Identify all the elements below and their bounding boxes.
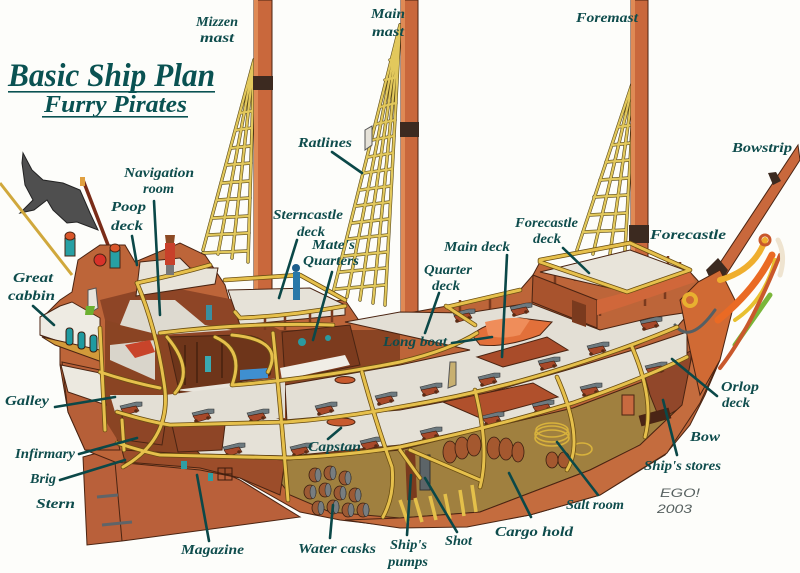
label: great cabbin [8, 271, 55, 325]
panel: lower stern gallery [61, 365, 106, 405]
bowsprit [706, 145, 800, 292]
title: Basic Ship Plan [7, 58, 215, 94]
label: brig [29, 460, 125, 487]
label: great cabbin: cabbin [8, 289, 55, 304]
label: bow: Bow [689, 430, 721, 445]
label: ship's pumps: pumps [387, 555, 429, 570]
rigging: ratlines [203, 25, 635, 305]
label: sterncastle deck: deck [297, 225, 325, 240]
cannons [120, 303, 667, 457]
stern lanterns and ornament [65, 232, 120, 268]
label: shot [425, 478, 473, 549]
storeroom below gun deck [172, 425, 225, 452]
longboat and gratings [443, 318, 568, 418]
hull planking bow band [345, 340, 720, 528]
label: main deck: Main deck [443, 240, 510, 255]
label: ratlines: Ratlines [297, 136, 353, 151]
label: mate's quarters: Mate's [311, 238, 356, 253]
foremast [627, 0, 652, 281]
figurehead [675, 235, 783, 368]
label: orlop deck [672, 359, 759, 411]
label: infirmary: Infirmary [14, 447, 76, 462]
label: quarter deck: Quarter [424, 263, 473, 278]
label: mate's quarters: Quarters [303, 254, 360, 269]
label: sterncastle deck: Sterncastle [273, 208, 343, 223]
label: long boat: Long boat [382, 335, 448, 350]
label: main mast [370, 7, 405, 40]
signature: EGO! [660, 486, 701, 500]
label: long boat [382, 335, 492, 350]
title [7, 58, 215, 118]
signature [656, 486, 701, 516]
structural rails and ribs [100, 243, 690, 517]
label: stern: Stern [36, 497, 75, 512]
label: poop deck [111, 200, 146, 265]
panel: poop deck floor [136, 258, 218, 296]
label: capstan: Capstan [308, 440, 361, 455]
label: brig: Brig [29, 472, 56, 487]
mizzen mast [252, 0, 274, 312]
label: mate's quarters [303, 238, 360, 340]
label: salt room: Salt room [566, 498, 624, 513]
label: infirmary [14, 438, 137, 462]
panel: sterncastle deck [228, 288, 345, 325]
label: salt room [557, 442, 624, 513]
label: sterncastle deck [273, 208, 343, 298]
label: water casks: Water casks [298, 542, 377, 557]
label: forecastle deck: Forecastle [514, 216, 578, 231]
label: galley [5, 394, 115, 409]
label: quarter deck [424, 263, 473, 333]
panel: main deck floor [285, 303, 690, 422]
label: navigation room: Navigation [123, 166, 194, 181]
label: main deck [443, 240, 510, 357]
label: ratlines [297, 136, 362, 173]
label: poop deck: deck [111, 219, 143, 234]
shot locker and pumps [410, 450, 430, 500]
label: mizzen mast: Mizzen [195, 15, 238, 30]
label: mizzen mast [195, 15, 238, 46]
label: water casks [298, 505, 377, 557]
title: Furry Pirates [43, 92, 187, 118]
capstans [327, 376, 671, 426]
deck posts [265, 256, 680, 330]
label: mizzen mast: mast [200, 31, 235, 46]
label: main mast: mast [372, 25, 405, 40]
label: magazine [180, 475, 244, 558]
hold floor [265, 358, 692, 518]
label: forecastle deck: deck [533, 232, 561, 247]
bow knee [680, 270, 735, 395]
panel: great cabin gallery [40, 302, 102, 362]
salt room rope coil [535, 423, 592, 455]
label: ship's stores [644, 400, 722, 474]
magazine wall [122, 450, 285, 495]
label: foremast: Foremast [575, 11, 639, 26]
label: magazine: Magazine [180, 543, 244, 558]
stern rudder [83, 448, 300, 545]
forecastle underside [597, 272, 695, 315]
label: shot: Shot [445, 534, 473, 549]
signature: 2003 [656, 502, 692, 516]
panel: lower gun deck floor [170, 332, 687, 456]
label: cargo hold [495, 473, 574, 540]
label: ship's pumps: Ship's [390, 538, 428, 553]
flag and staff [0, 153, 108, 275]
label: quarter deck: deck [432, 279, 460, 294]
label: ship's pumps [387, 475, 429, 570]
cargo barrels [443, 434, 570, 468]
stern upper walls [62, 362, 120, 450]
water casks [304, 466, 369, 517]
upper hull cut wall sterncastle [100, 285, 240, 340]
label: forecastle: Forecastle [649, 228, 726, 243]
label: navigation room: room [143, 182, 174, 197]
label: galley: Galley [5, 394, 50, 409]
main mast [398, 0, 421, 327]
panel: gun deck left floor [110, 380, 285, 425]
label: capstan [308, 428, 361, 455]
label: ship's stores: Ship's stores [644, 459, 722, 474]
stern ribs of hull [400, 485, 476, 523]
label: orlop deck: Orlop [721, 380, 759, 395]
interior wood backdrop [105, 300, 400, 460]
panel: great cabin room [110, 340, 155, 380]
label: bowstrip: Bowstrip [731, 141, 792, 156]
hull base [40, 243, 720, 527]
panel: mate's quarters [280, 325, 360, 380]
bow stores [645, 350, 692, 420]
label: main mast: Main [370, 7, 405, 22]
infirmary room [122, 415, 165, 445]
panel: navigation room floor [120, 300, 232, 335]
label: great cabbin: Great [13, 271, 54, 286]
label: cargo hold: Cargo hold [495, 525, 574, 540]
panel: arched cabin [167, 335, 280, 396]
panel: forecastle deck [540, 250, 690, 292]
forecastle bulkhead [532, 275, 597, 535]
pirate figures [85, 126, 456, 388]
label: forecastle deck [514, 216, 589, 273]
label: navigation room [123, 166, 194, 315]
label: poop deck: Poop [111, 200, 146, 215]
label: orlop deck: deck [722, 396, 750, 411]
